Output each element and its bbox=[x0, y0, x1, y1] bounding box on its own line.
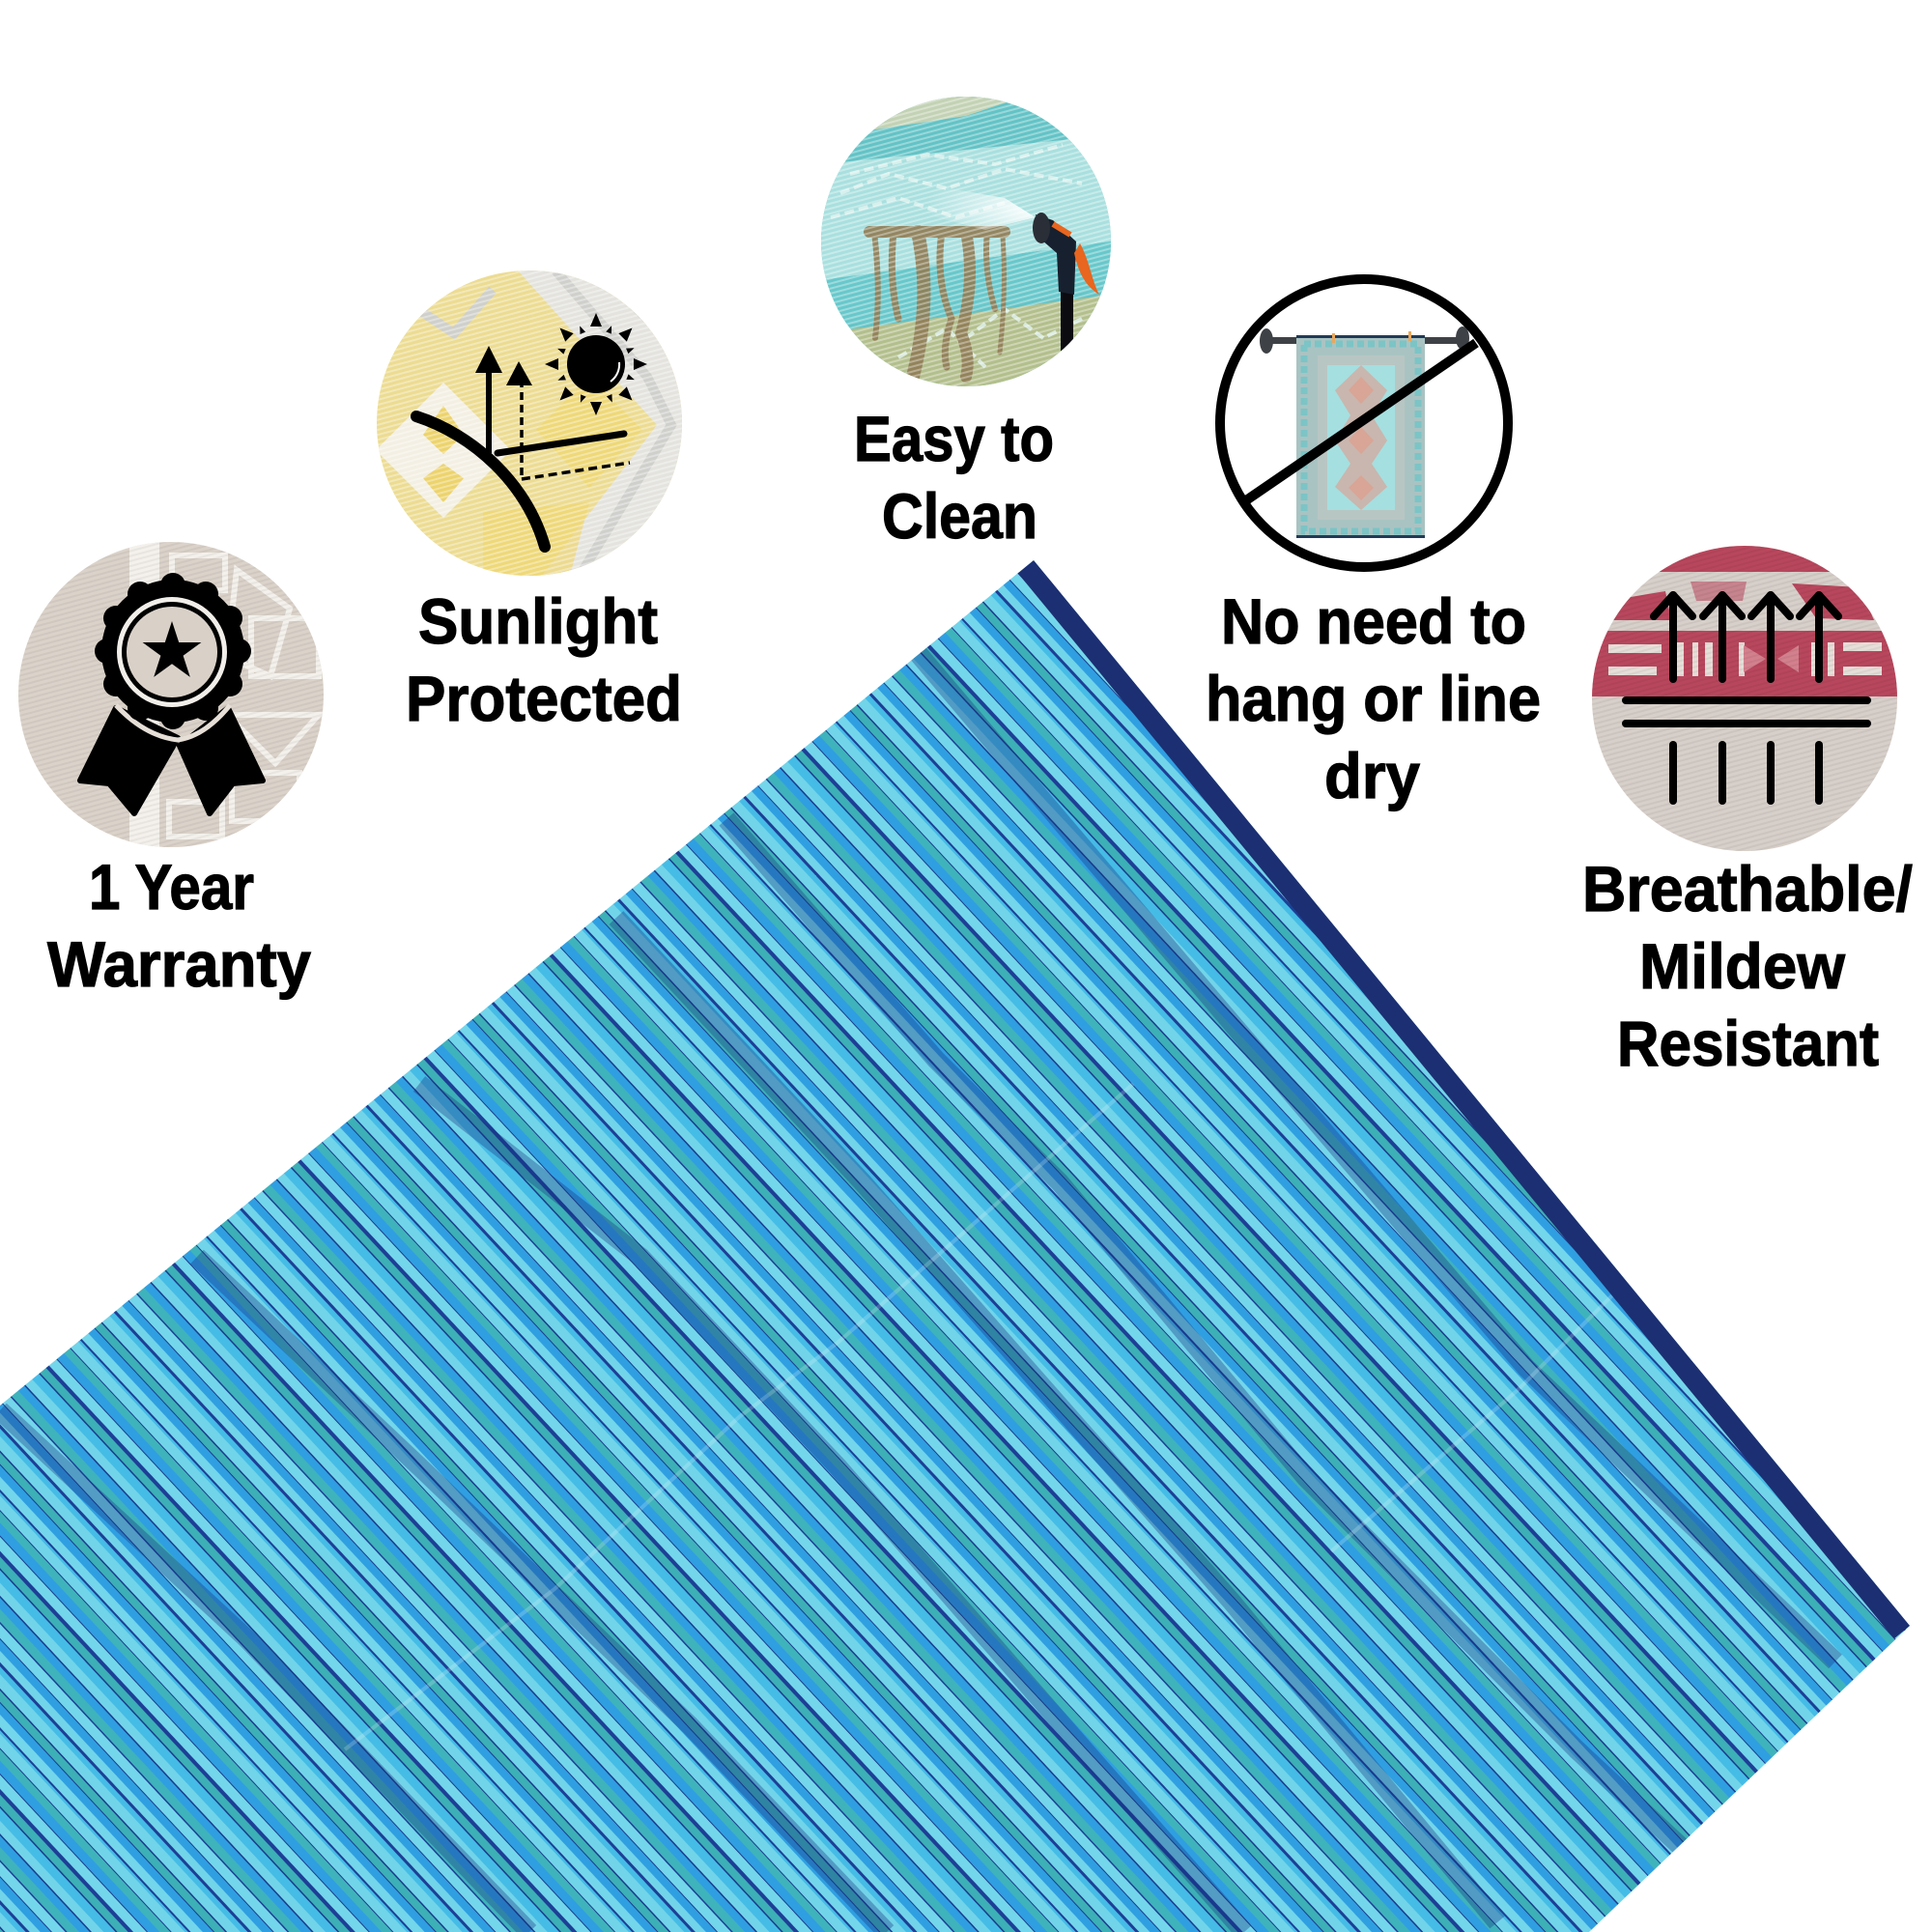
badge: sunlight protected bbox=[376, 270, 696, 734]
label: No need to hang or line dry: hang or line bbox=[1206, 663, 1541, 734]
icon: hose spray nozzle bbox=[1033, 213, 1099, 357]
label: Easy to Clean: Clean bbox=[882, 480, 1037, 552]
label: No need to hang or line dry bbox=[1206, 585, 1541, 811]
label: 1 Year Warranty: Warranty bbox=[47, 928, 311, 1000]
badge: no need to hang or line dry bbox=[1206, 279, 1541, 811]
circle photo: teal rug being washed bbox=[821, 97, 1111, 386]
label: Breathable / Mildew Resistant bbox=[1582, 853, 1913, 1079]
icon: award rosette with star bbox=[80, 573, 263, 813]
label: No need to hang or line dry: dry bbox=[1324, 740, 1420, 811]
icon: prohibited hanging rug bbox=[1220, 279, 1508, 567]
label: Easy to Clean bbox=[854, 403, 1054, 552]
label: Sunlight Protected: Sunlight bbox=[418, 585, 658, 657]
label: Sunlight Protected: Protected bbox=[406, 663, 682, 734]
badge: 1 year warranty bbox=[18, 542, 324, 1000]
label: 1 Year Warranty bbox=[47, 851, 311, 1000]
circle photo: red and beige woven texture bbox=[1591, 546, 1897, 851]
circle photo: yellow woven texture bbox=[376, 270, 696, 576]
label: Sunlight Protected bbox=[406, 585, 682, 734]
brown drips of dirt bbox=[869, 232, 1005, 377]
badge: easy to clean bbox=[821, 97, 1111, 552]
label: Breathable / Mildew Resistant: Mildew bbox=[1639, 930, 1846, 1002]
label: Breathable / Mildew Resistant: Resistant bbox=[1617, 1008, 1879, 1079]
label: No need to hang or line dry: No need to bbox=[1221, 585, 1526, 657]
curtain rod bbox=[1260, 327, 1469, 354]
striped rug product photo bbox=[0, 560, 1910, 1932]
badge: breathable mildew resistant bbox=[1582, 546, 1913, 1079]
hanging patterned rug bbox=[1296, 331, 1425, 538]
label: Easy to Clean: Easy to bbox=[854, 403, 1054, 474]
label: Breathable / Mildew Resistant: Breathable/ bbox=[1582, 853, 1913, 924]
circle photo: beige woven texture bbox=[18, 542, 324, 847]
icon: sun with reflected rays and surface bbox=[416, 313, 647, 547]
icon: airflow arrows through layers bbox=[1626, 595, 1867, 801]
label: 1 Year Warranty: 1 Year bbox=[89, 851, 254, 923]
